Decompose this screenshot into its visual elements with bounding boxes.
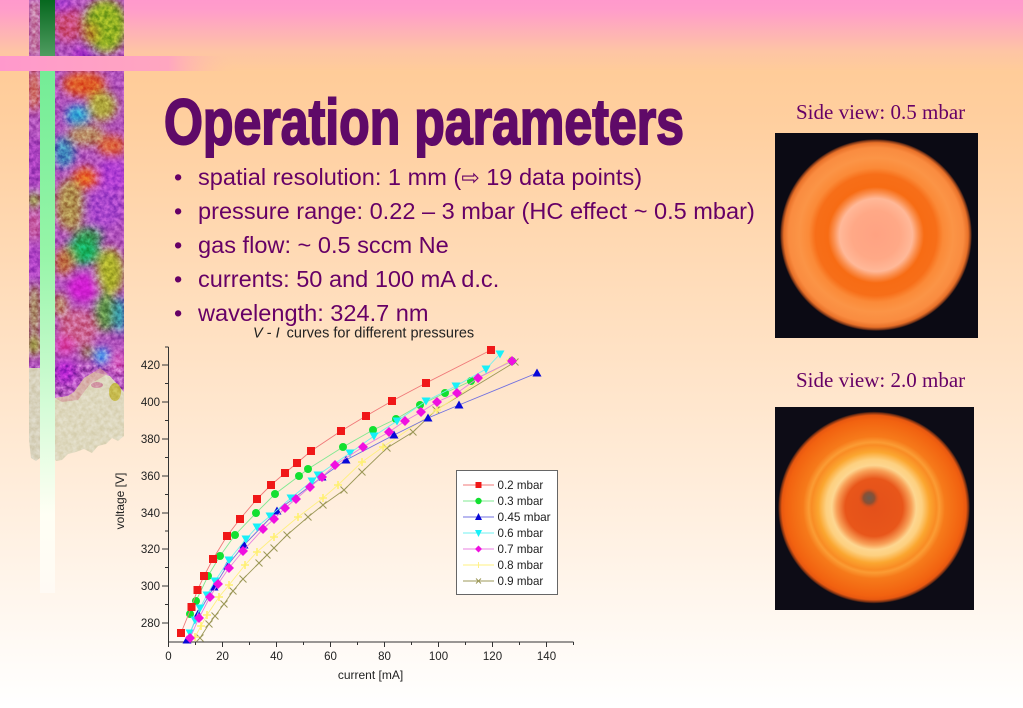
x axis: current [mA]: [338, 668, 403, 682]
bullet: spatial resolution: •: [174, 164, 182, 190]
x axis: 0: [165, 651, 172, 663]
legend entry: 0.2 mbar: 0.2 mbar: [498, 479, 543, 492]
x axis: 20: [216, 651, 229, 663]
bullet: currents: •: [174, 266, 182, 292]
caption: side view 0.5 mbar: Side view: 0.5 mbar: [796, 100, 965, 124]
y axis: voltage [V]: [113, 473, 127, 529]
series: 0.8 mbar: [195, 360, 510, 637]
x axis: 80: [378, 651, 391, 663]
y axis: [113, 347, 168, 642]
bullet: pressure range: pressure range: 0.22 – 3 mbar (HC effect ~ 0.5 mbar): [198, 198, 755, 224]
legend entry: 0.7 mbar: 0.7 mbar: [498, 543, 543, 556]
y axis: 300: [141, 581, 160, 593]
bullet: wavelength: wavelength: 324.7 nm: [198, 300, 429, 326]
mosaic texture: [26, 0, 128, 470]
series: 0.3 mbar: [190, 361, 512, 614]
photo: plasma side view 0.5 mbar: [775, 133, 978, 338]
x axis: 60: [324, 651, 337, 663]
legend entry: 0.3 mbar: 0.3 mbar: [498, 495, 543, 508]
chart title: V - I curves for different pressures: [253, 326, 474, 342]
legend entry: 0.9 mbar: 0.9 mbar: [498, 575, 543, 588]
y axis: 320: [141, 544, 160, 556]
y axis: 420: [141, 360, 160, 372]
bullet: spatial resolution: spatial resolution: 1 mm ( 19 data points): [198, 164, 642, 190]
y axis: 380: [141, 434, 160, 446]
x axis: [165, 642, 574, 682]
photo: plasma side view 2.0 mbar: [775, 407, 974, 610]
bullet: currents: currents: 50 and 100 mA d.c.: [198, 266, 499, 292]
y axis: 360: [141, 471, 160, 483]
bullet: gas flow: •: [174, 232, 182, 258]
x axis: 40: [270, 651, 283, 663]
legend entry: 0.8 mbar: 0.8 mbar: [498, 559, 543, 572]
bullet: gas flow: gas flow: ~ 0.5 sccm Ne: [198, 232, 449, 258]
bullet: pressure range: •: [174, 198, 182, 224]
pink horizontal bar: [0, 56, 240, 71]
y axis: 400: [141, 397, 160, 409]
series: 0.6 mbar: [190, 354, 500, 633]
bullet: spatial resolution: ⇨: [461, 166, 480, 191]
light green bar segment: [40, 71, 55, 593]
dark green bar segment: [40, 0, 55, 56]
series: 0.2 mbar: [181, 350, 491, 633]
x axis: 120: [483, 651, 502, 663]
bullet: wavelength: •: [174, 300, 182, 326]
x axis: 140: [537, 651, 556, 663]
series: 0.7 mbar: [190, 361, 512, 638]
caption: side view 2.0 mbar: Side view: 2.0 mbar: [796, 368, 965, 392]
series: 0.45 mbar: [187, 373, 537, 640]
y axis: 340: [141, 508, 160, 520]
legend entry: 0.6 mbar: 0.6 mbar: [498, 527, 543, 540]
decorative side mosaic with green bar and pink bar: [0, 0, 206, 590]
x axis: 100: [429, 651, 448, 663]
bullet list: [174, 164, 755, 326]
legend: [456, 470, 558, 594]
series: 0.9 mbar: [200, 362, 515, 638]
y axis: 280: [141, 618, 160, 630]
legend entry: 0.45 mbar: 0.45 mbar: [498, 510, 551, 524]
